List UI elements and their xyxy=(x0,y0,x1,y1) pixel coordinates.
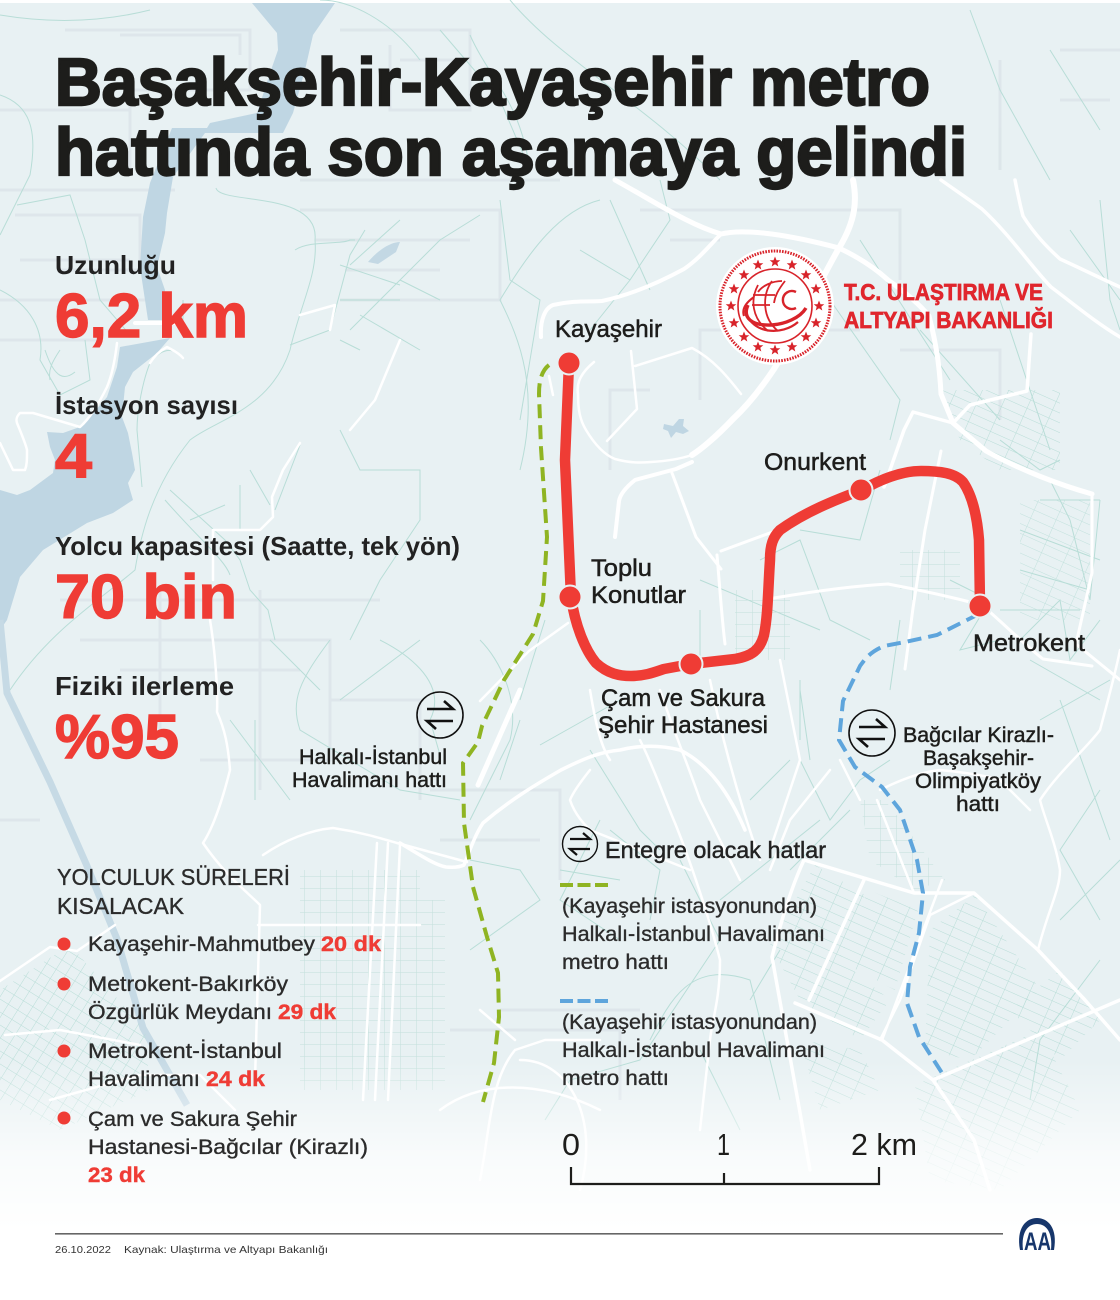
item: Metrokent-Bakırköy: Özgürlük Meydanı xyxy=(88,1001,272,1024)
footer rule xyxy=(55,1233,1003,1235)
legend icon xyxy=(562,826,598,862)
scale bar: 0 xyxy=(562,1127,580,1162)
item: Metrokent-Bakırköy xyxy=(58,973,336,1024)
legend text: blue: Halkalı-İstanbul Havalimanı xyxy=(562,1039,825,1062)
item: Kayaşehir-Mahmutbey: 20 dk xyxy=(321,933,381,956)
legend text: blue: (Kayaşehir istasyonundan) xyxy=(562,1011,817,1034)
residential blocks xyxy=(0,945,150,1130)
blue dashed line: Bağcılar Kirazlı-Başakşehir-Olimpiyatköy xyxy=(839,614,979,1073)
legend text: blue: metro hattı xyxy=(562,1067,669,1090)
station labels: Konutlar xyxy=(591,582,686,609)
label: Halkalı-İstanbul line: Havalimanı hattı xyxy=(292,769,447,792)
travel times heading: YOLCULUK SÜRELERİ xyxy=(57,864,290,890)
legend text: blue xyxy=(562,1011,825,1090)
label: Bağcılar line: hattı xyxy=(956,793,1000,816)
item: Kayaşehir-Mahmutbey xyxy=(58,933,381,956)
travel times heading xyxy=(57,864,290,919)
stat: physical progress: Fiziki ilerleme xyxy=(55,671,234,701)
label: Bağcılar line: Bağcılar Kirazlı- xyxy=(903,724,1054,747)
stat: passenger capacity xyxy=(55,531,460,632)
stations xyxy=(558,352,992,676)
bottom white fade xyxy=(0,1060,1120,1230)
water: lake north xyxy=(140,3,335,320)
label: Bağcılar line: Olimpiyatköy xyxy=(915,770,1042,793)
river xyxy=(0,620,187,1105)
ministry name xyxy=(844,279,1053,333)
label: Bağcılar line xyxy=(903,724,1054,816)
label: Halkalı-İstanbul line xyxy=(292,746,447,792)
item: Metrokent-Bakırköy: Metrokent-Bakırköy xyxy=(88,973,289,996)
item: Metrokent-İstanbul Havalimanı xyxy=(58,1040,282,1091)
stat: length: Uzunluğu xyxy=(55,250,176,280)
item: Kayaşehir-Mahmutbey: Kayaşehir-Mahmutbey xyxy=(88,933,316,956)
legend text: green: Halkalı-İstanbul Havalimanı xyxy=(562,923,825,946)
item: Çam ve Sakura Şehir Hastanesi-Bağcılar: Hastanesi-Bağcılar (Kirazlı) xyxy=(88,1136,368,1159)
ministry name: T.C. ULAŞTIRMA VE xyxy=(844,279,1043,305)
stat: station count: 4 xyxy=(55,422,93,491)
station labels: Çam ve Sakura xyxy=(601,685,766,712)
scale bar: 1 xyxy=(717,1127,730,1162)
item: Çam ve Sakura Şehir Hastanesi-Bağcılar: 23 dk xyxy=(88,1164,145,1187)
title: Başakşehir-Kayaşehir metro xyxy=(55,45,930,120)
logo: AA: AA xyxy=(1024,1228,1051,1256)
seal globe xyxy=(743,281,806,331)
legend heading: Entegre olacak hatlar xyxy=(605,837,826,863)
item: Çam ve Sakura Şehir Hastanesi-Bağcılar xyxy=(58,1108,368,1187)
legend text: green xyxy=(562,895,825,974)
green dashed line: Halkalı-İstanbul Havalimanı xyxy=(463,365,549,1102)
red metro line xyxy=(565,363,980,676)
stat: physical progress: %95 xyxy=(55,703,179,772)
legend swatch: green xyxy=(560,883,608,887)
station labels: Toplu xyxy=(591,555,652,582)
label: Halkalı-İstanbul line: Halkalı-İstanbul xyxy=(299,746,447,769)
item: Metrokent-İstanbul Havalimanı: Metrokent-İstanbul xyxy=(88,1040,282,1063)
stat: length xyxy=(55,250,248,351)
scale bar xyxy=(562,1127,917,1184)
icon: interchange Halkalı xyxy=(417,692,463,738)
station labels: Onurkent xyxy=(764,449,866,476)
station labels xyxy=(555,316,1085,739)
travel times heading: KISALACAK xyxy=(57,893,185,919)
footer source: Kaynak: Ulaştırma ve Altyapı Bakanlığı xyxy=(124,1244,328,1256)
travel time list xyxy=(58,933,381,1187)
label: Bağcılar line: Başakşehir- xyxy=(923,747,1034,770)
stat: physical progress xyxy=(55,671,234,772)
seal stars xyxy=(726,256,824,354)
stat: passenger capacity: Yolcu kapasitesi (Saatte, tek yön) xyxy=(55,531,460,561)
item: Metrokent-Bakırköy: 29 dk xyxy=(278,1001,336,1024)
logo: AA xyxy=(1019,1218,1055,1256)
item: Metrokent-İstanbul Havalimanı: Havalimanı xyxy=(88,1068,200,1091)
stat: station count xyxy=(55,390,238,491)
title: hattında son aşamaya gelindi xyxy=(55,115,967,190)
station labels: Metrokent xyxy=(973,630,1085,657)
main roads xyxy=(0,180,1120,1190)
legend text: green: metro hattı xyxy=(562,951,669,974)
footer source xyxy=(55,1244,328,1256)
scale bar: 2 km xyxy=(851,1127,917,1162)
item: Çam ve Sakura Şehir Hastanesi-Bağcılar: Çam ve Sakura Şehir xyxy=(88,1108,297,1131)
legend text: green: (Kayaşehir istasyonundan) xyxy=(562,895,817,918)
station labels: Kayaşehir xyxy=(555,316,662,343)
stat: station count: İstasyon sayısı xyxy=(55,390,238,420)
item: Metrokent-İstanbul Havalimanı: 24 dk xyxy=(206,1068,265,1091)
logo: ministry seal xyxy=(716,247,834,365)
ponds xyxy=(368,242,400,264)
stat: passenger capacity: 70 bin xyxy=(55,563,237,632)
station labels: Şehir Hastanesi xyxy=(598,712,768,739)
footer source: 26.10.2022 xyxy=(55,1244,111,1256)
water: lake south xyxy=(0,338,170,630)
legend xyxy=(560,826,826,1090)
title xyxy=(55,45,967,190)
icon: interchange Bağcılar xyxy=(849,710,895,756)
legend swatch: blue xyxy=(560,999,608,1003)
stat: length: 6,2 km xyxy=(55,282,248,351)
ministry name: ALTYAPI BAKANLIĞI xyxy=(844,306,1053,333)
